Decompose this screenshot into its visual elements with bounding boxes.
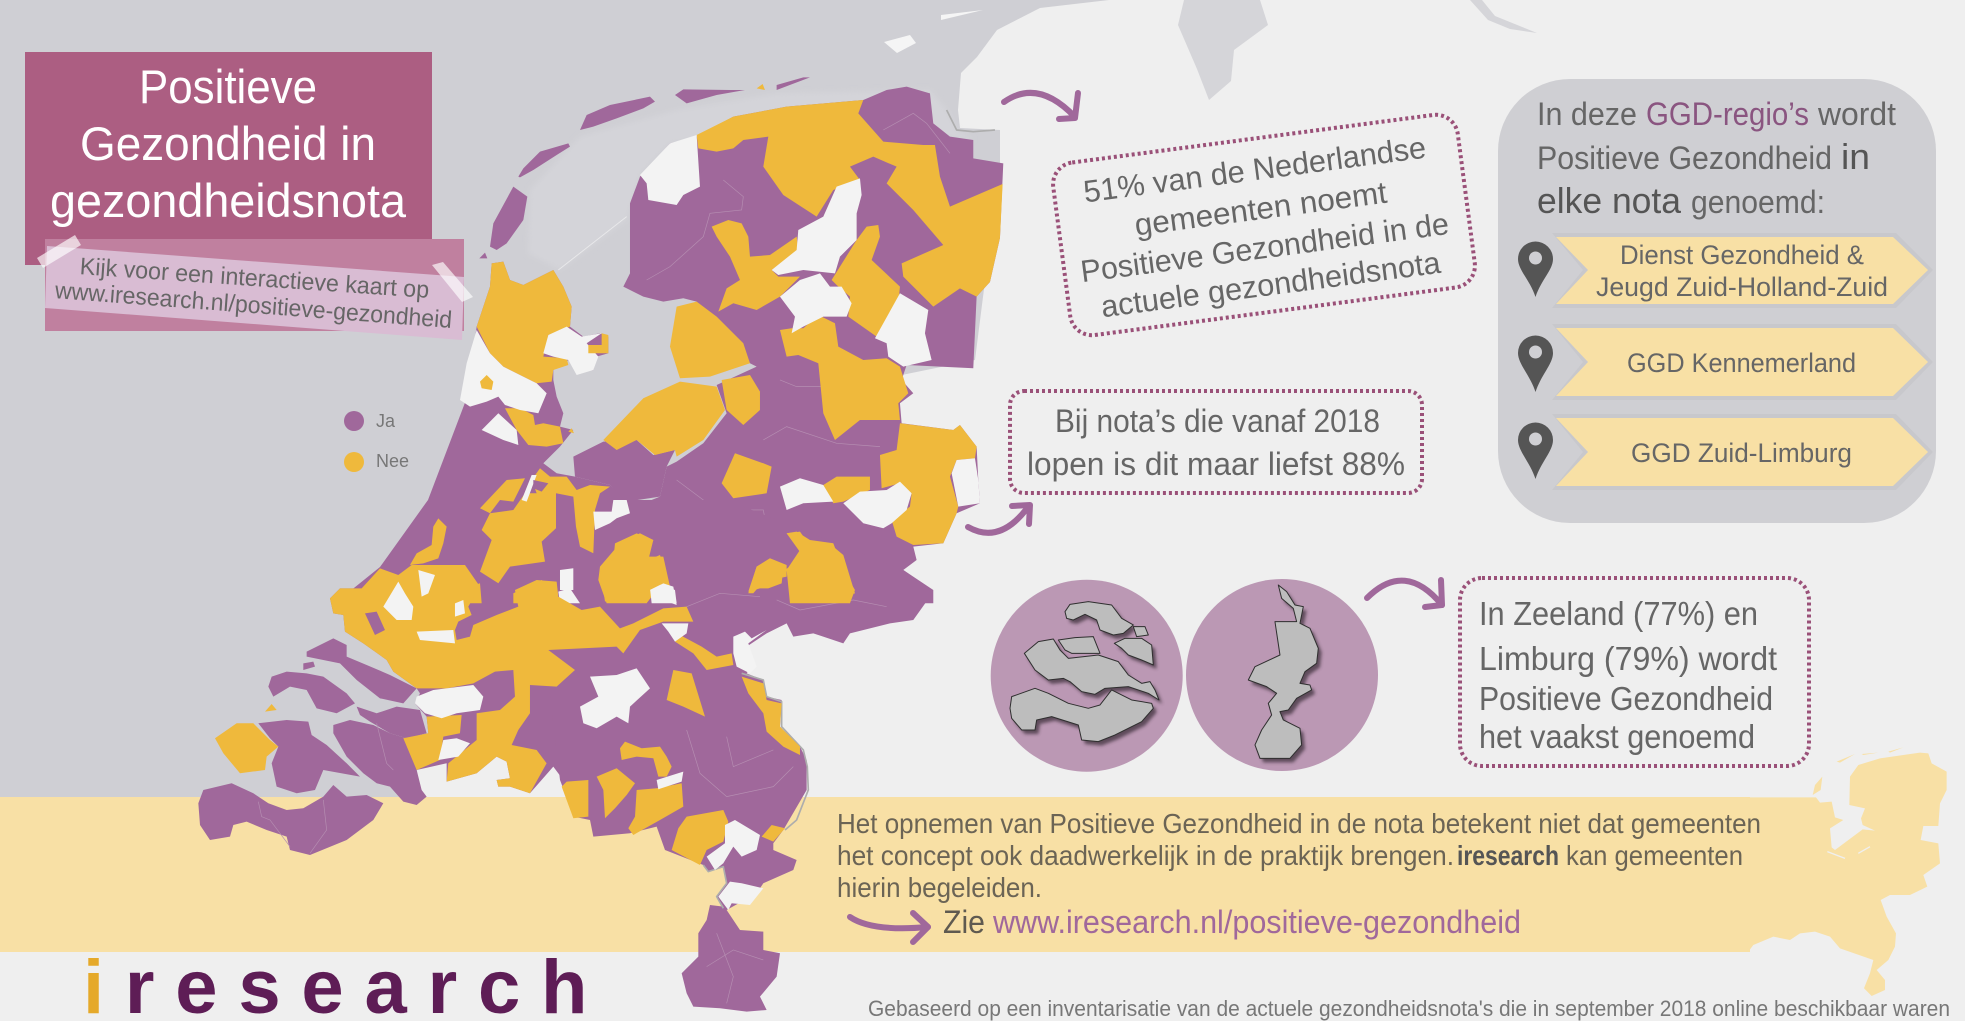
title block: gezondheidsnota [50, 174, 407, 227]
panel heading: Positieve Gezondheid [1537, 140, 1832, 176]
callout: Zeeland and Limburg: In Zeeland (77%) en [1479, 595, 1758, 632]
panel heading: elke nota [1537, 180, 1682, 221]
German coast shapes [884, 0, 1537, 100]
region 1: Dienst Gezondheid & Jeugd Zuid-Holland-Zuid [1552, 233, 1933, 308]
icon: pin 2 [1518, 336, 1553, 392]
callout: Zeeland and Limburg [1460, 578, 1809, 766]
panel heading: wordt [1817, 96, 1896, 132]
title block: Gezondheid in [80, 117, 376, 170]
band text block: iresearch [1457, 840, 1559, 871]
callout: 51% of municipalities: gemeenten noemt [1132, 175, 1389, 243]
yellow band with Netherlands silhouette [0, 747, 1947, 996]
callout: 51% of municipalities: actuele gezondheidsnota [1099, 245, 1443, 324]
callout: 51% of municipalities [1050, 112, 1478, 338]
subtitle note with interactive map link: Kijk voor een interactieve kaart op [79, 253, 430, 304]
legend: Nee [376, 451, 409, 471]
band text block: Het opnemen van Positieve Gezondheid in de nota betekent niet dat gemeenten [837, 808, 1761, 839]
arrow: to link [850, 913, 928, 942]
panel heading: In deze [1537, 96, 1637, 132]
map: south-west yellow and white regions [215, 518, 693, 793]
arrow: from 88% callout [968, 505, 1030, 533]
link to website: www.iresearch.nl/positieve-gezondheid [992, 904, 1521, 940]
callout: 88% from 2018: Bij nota’s die vanaf 2018 [1055, 403, 1380, 439]
legend [344, 411, 409, 472]
map: purple base of all municipalities [198, 77, 1003, 1012]
arrow: to Zeeland and Limburg callout [1367, 580, 1442, 607]
panel heading: GGD-regio’s [1646, 96, 1809, 132]
band text block: hierin begeleiden. [837, 872, 1042, 903]
circle: Zeeland map [991, 580, 1183, 772]
arrow: to 51% callout [1004, 93, 1078, 119]
panel heading: in [1841, 136, 1870, 177]
region 1: Dienst Gezondheid & Jeugd Zuid-Holland-Zuid: Dienst Gezondheid & [1620, 240, 1864, 270]
panel heading: genoemd: [1691, 184, 1825, 220]
icon: pin 3 [1518, 422, 1553, 479]
title block: Positieve [139, 60, 317, 113]
band text block [837, 808, 1761, 903]
legend: Ja [376, 411, 396, 431]
icon: pin 1 [1518, 242, 1553, 297]
map: northern yellow and white regions [460, 84, 1003, 603]
region 3: GGD Zuid-Limburg: GGD Zuid-Limburg [1631, 438, 1852, 468]
callout: 88% from 2018: lopen is dit maar liefst 88% [1027, 446, 1405, 482]
callout: 88% from 2018 [1010, 391, 1422, 493]
region 1: Dienst Gezondheid & Jeugd Zuid-Holland-Zuid: Jeugd Zuid-Holland-Zuid [1596, 272, 1888, 302]
callout: Zeeland and Limburg: Positieve Gezondheid [1479, 680, 1773, 717]
panel heading [1537, 96, 1896, 221]
map of the Netherlands [198, 77, 1003, 1012]
subtitle note with interactive map link: www.iresearch.nl/positieve-gezondheid [53, 277, 453, 334]
band text block: het concept ook daadwerkelijk in de praktijk brengen. [837, 840, 1454, 871]
link to website: Zie [943, 904, 985, 940]
sea background [0, 0, 1109, 797]
region 3: GGD Zuid-Limburg [1552, 414, 1933, 490]
subtitle note with interactive map link [37, 235, 473, 340]
band text block: kan gemeenten [1566, 840, 1743, 871]
callout: Zeeland and Limburg: Limburg (79%) wordt [1479, 640, 1777, 677]
callout: 51% of municipalities: Positieve Gezondheid in de [1078, 206, 1451, 289]
callout: 51% of municipalities: 51% van de Nederlandse [1081, 130, 1428, 209]
map: south-east yellow and white regions [562, 532, 855, 910]
region 2: GGD Kennemerland: GGD Kennemerland [1627, 348, 1856, 378]
circle: Limburg map [1186, 579, 1378, 771]
panel: GGD regions [1498, 79, 1936, 523]
title block [25, 52, 432, 265]
region 2: GGD Kennemerland [1552, 324, 1933, 400]
callout: Zeeland and Limburg: het vaakst genoemd [1479, 718, 1755, 755]
